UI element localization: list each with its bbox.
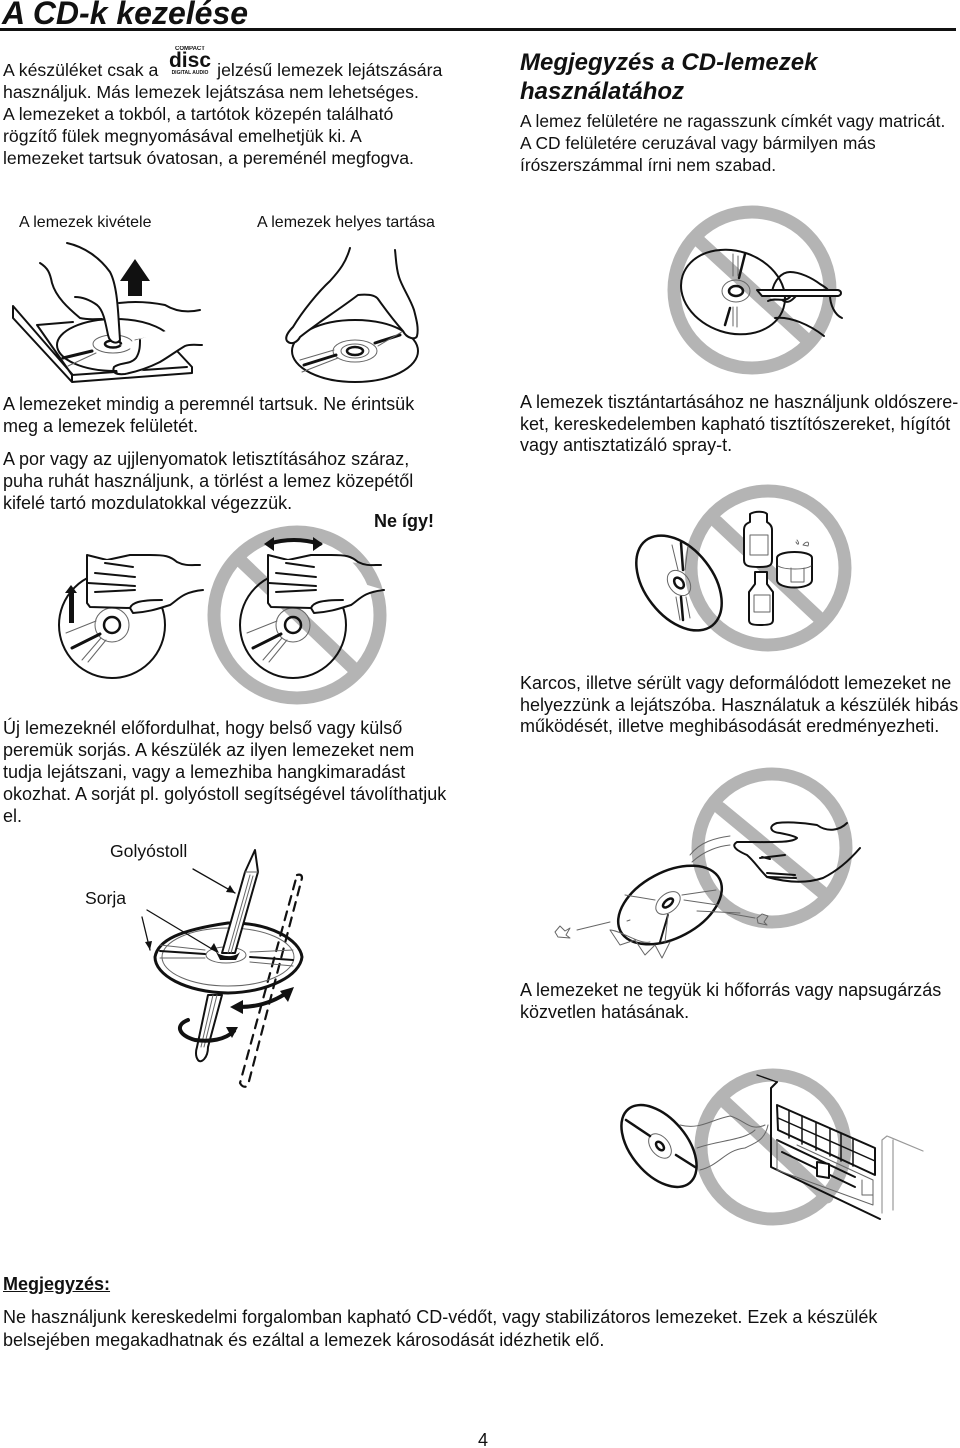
caption: removal: A lemezek kivétele [19,214,152,231]
text: new discs: tudja lejátszani, vagy a lemezhiba hangkimaradást [3,762,405,782]
note text: A lemez felületére ne ragasszunk címkét vagy matricát. [520,111,945,131]
illustration: wrong wipe [214,532,384,698]
note body: belsejében megakadhatnak és ezáltal a lemezek károsodását idézhetik elő. [3,1330,604,1350]
text: cleaning [3,449,413,513]
intro text [3,60,442,168]
text: cleaning: A por vagy az ujjlenyomatok letisztításához száraz, [3,449,409,469]
text: hold by edge: meg a lemezek felületét. [3,416,198,436]
illustration: removing disc from case [13,243,202,382]
text: cleaning: puha ruhát használjunk, a törlést a lemez közepétől [3,471,413,491]
text: hold by edge [3,394,414,436]
label: not like this: Ne így! [374,511,434,531]
label: burr: Sorja [85,888,126,908]
illustration: no solvents [619,491,845,646]
text: cleaning: kifelé tartó mozdulatokkal végezzük. [3,493,292,513]
text: damaged discs: helyezzünk a lejátszóba. Használatuk a készülék hibás [520,694,958,714]
text: solvents: vagy antisztatizáló spray-t. [520,435,732,455]
note text [520,111,945,175]
note body: Ne használjunk kereskedelmi forgalomban kapható CD-védőt, vagy stabilizátoros lemezeket. Ezek a készülék [3,1307,877,1327]
illustration: wipe outward [59,555,203,678]
note body [3,1307,878,1350]
text: damaged discs: Karcos, illetve sérült vagy deformálódott lemezeket ne [520,673,951,693]
intro text: használjuk. Más lemezek lejátszása nem lehetséges. [3,82,419,102]
text: solvents: ket, kereskedelemben kapható tisztítószereket, hígítót [520,414,950,434]
text: solvents [520,392,958,455]
note heading [520,49,818,105]
text: hold by edge: A lemezeket mindig a peremnél tartsuk. Ne érintsük [3,394,414,414]
text: new discs [3,718,446,826]
illustration: damaged disc [555,774,860,960]
text: new discs: okozhat. A sorját pl. golyóstoll segítségével távolíthatjuk [3,784,446,804]
intro text: A készüléket csak a jelzésű lemezek lejátszására [3,60,442,80]
illustration: burr removal with pen [142,850,302,1087]
note label: Megjegyzés: [3,1274,110,1294]
title rule [0,28,956,31]
illustration: heat source [607,1075,923,1219]
caption: holding: A lemezek helyes tartása [257,214,435,231]
note heading: Megjegyzés a CD-lemezek [520,49,817,76]
icon: compact disc logo: disc [169,49,211,72]
text: damaged discs: működését, illetve meghibásodását eredményezheti. [520,716,939,736]
text: solvents: A lemezek tisztántartásához ne használjunk oldószere- [520,392,958,412]
note text: írószerszámmal írni nem szabad. [520,155,776,175]
text: new discs: Új lemezeknél előfordulhat, hogy belső vagy külső [3,718,402,738]
intro text: A lemezeket a tokból, a tartótok közepén található [3,104,393,124]
intro text: lemezeket tartsuk óvatosan, a pereménél megfogva. [3,148,414,168]
text: new discs: el. [3,806,22,826]
text: heat [520,980,941,1022]
icon: compact disc logo: DIGITAL AUDIO [172,70,208,76]
text: heat: A lemezeket ne tegyük ki hőforrás vagy napsugárzás [520,980,941,1000]
icon: compact disc logo: COMPACT [175,46,205,52]
illustration: do not write on disc [670,212,842,368]
intro text: rögzítő fülek megnyomásával emelhetjük ki. A [3,126,362,146]
note text: A CD felületére ceruzával vagy bármilyen más [520,133,876,153]
text: damaged discs [520,673,958,736]
note heading: használatához [520,78,684,105]
text: new discs: peremük sorjás. A készülék az ilyen lemezeket nem [3,740,414,760]
illustration: holding disc by edge [286,248,418,382]
text: heat: közvetlen hatásának. [520,1002,689,1022]
label: pen: Golyóstoll [110,841,187,861]
